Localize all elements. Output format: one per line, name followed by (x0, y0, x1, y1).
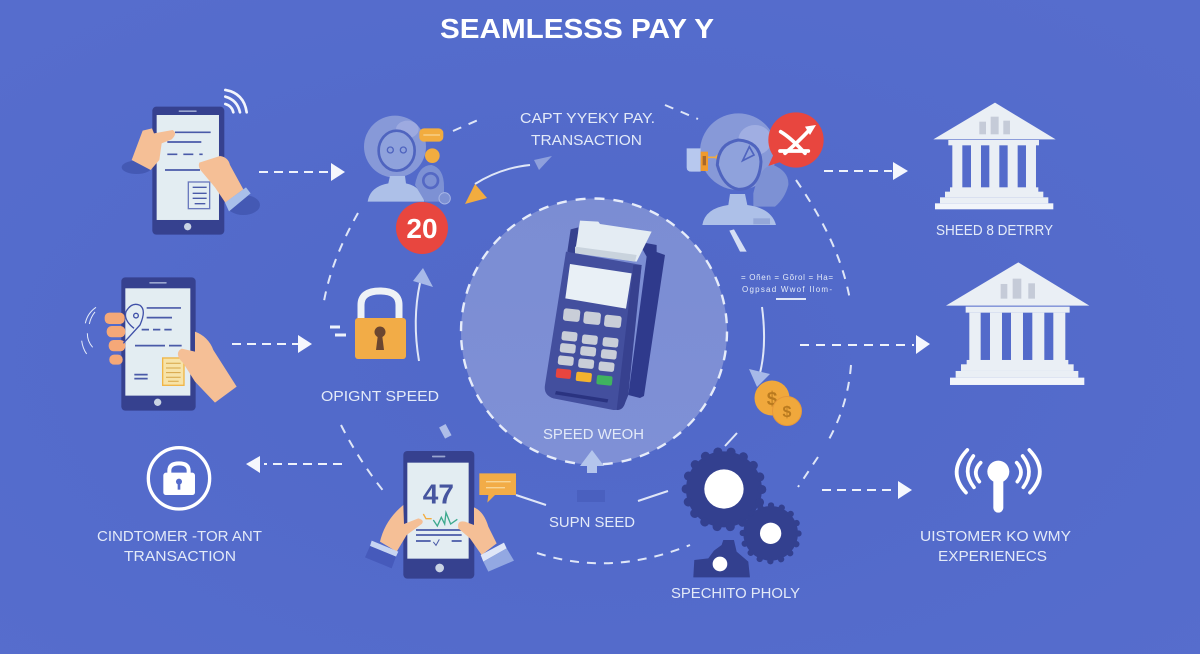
tiny caption, right of disc: = Oñen = Gõrol = Ha= (741, 273, 833, 282)
label: speed weoh: SPEED WEOH (543, 426, 644, 443)
icon: phone with chart: 47 (423, 478, 454, 509)
arrow: lock up to badge (413, 268, 433, 361)
arrow: to top bank (824, 162, 908, 180)
arrow: phone two to lock (232, 335, 312, 353)
arrow: to bottom left lock (246, 456, 342, 473)
tiny caption, right of disc (741, 273, 833, 300)
label: customer experiences (920, 528, 1071, 565)
arrow: to middle bank (800, 335, 930, 354)
arrow: gold triangle with curve (465, 156, 552, 204)
icon: coins (754, 380, 802, 426)
icon: gears (686, 451, 799, 577)
label: supn seed: SUPN SEED (549, 514, 635, 531)
label: customer experiences: UISTOMER KO WMY (920, 528, 1071, 545)
icon: padlock (330, 291, 406, 359)
icon: coins: $ (767, 389, 778, 410)
label: customer experiences: EXPERIENECS (938, 548, 1047, 565)
icon: phone with chart (365, 424, 516, 579)
label: capt yyeky pay transaction: CAPT YYEKY PAY. (520, 110, 655, 127)
arrow: to antenna (822, 481, 912, 499)
label: specifito pholy: SPECHITO PHOLY (671, 585, 800, 602)
label: customer transaction: CINDTOMER -TOR ANT (97, 528, 262, 545)
icon: antenna signal (957, 450, 1040, 513)
icon: coins: $ (783, 404, 792, 421)
outer dashed ring (323, 105, 851, 563)
icon: phone with hand, middle left (82, 277, 237, 411)
label: sheed 8 detrry: SHEED 8 DETRRY (936, 222, 1053, 239)
icon: person with gauge and red bubble (687, 112, 824, 252)
solid connector strokes (516, 491, 668, 505)
label: customer transaction: TRANSACTION (124, 548, 236, 565)
label: opignt speed: OPIGNT SPEED (321, 388, 439, 405)
icon: lock in circle (148, 448, 210, 509)
badge: number 20: 20 (406, 213, 438, 244)
label: customer transaction (97, 528, 262, 565)
icon: phone with hands, top left (122, 90, 260, 235)
badge: number 20 (396, 202, 448, 254)
arrow: phone one to person (259, 163, 345, 181)
icon: payment terminal (545, 221, 665, 410)
center disc (461, 198, 727, 464)
icon: bank top (933, 103, 1056, 209)
tiny caption, right of disc: Ogpsad Wwof Ilom- (742, 285, 832, 294)
label: capt yyeky pay transaction: TRANSACTION (531, 132, 642, 149)
decorative connector block (577, 490, 605, 502)
label: capt yyeky pay transaction (520, 110, 655, 149)
arrow: curve to coins (749, 307, 770, 387)
icon: person with chat and gear (364, 116, 450, 204)
arrow: up to disc (580, 450, 604, 473)
icon: bank middle (946, 262, 1089, 385)
title: SEAMLESSS PAY Y (440, 13, 714, 44)
